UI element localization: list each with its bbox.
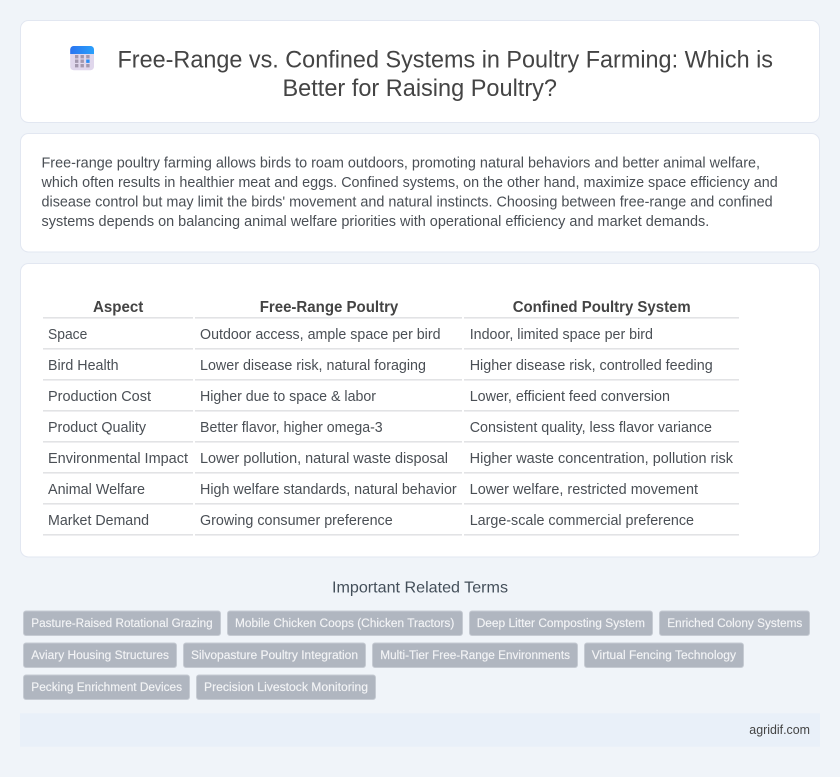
table row: product quality	[43, 420, 739, 443]
panel: introduction	[20, 134, 820, 252]
table header row: Confined Poultry System	[513, 299, 691, 316]
tag	[24, 611, 220, 636]
table row: market demand: Large-scale commercial preference	[470, 513, 694, 529]
tag: Pasture-Raised Rotational Grazing	[31, 616, 213, 630]
tag	[24, 675, 190, 700]
title: Free-Range vs. Confined Systems in Poultry Farming: Which is	[118, 46, 773, 74]
tag	[584, 643, 744, 668]
tag: Enriched Colony Systems	[667, 616, 802, 630]
table row: production cost: Higher due to space & labor	[200, 389, 376, 405]
table row: product quality: Product Quality	[48, 420, 147, 436]
table row: animal welfare: High welfare standards, natural behavior	[200, 482, 457, 498]
text block: introduction paragraph: Free-range poultry farming allows birds to roam outdoors, promoting natural behaviors and better animal welfare,	[42, 156, 760, 172]
table row: space: Indoor, limited space per bird	[470, 327, 653, 343]
table row: environmental impact: Environmental Impact	[48, 451, 188, 467]
title	[118, 46, 773, 102]
text block: introduction paragraph: disease control but may limit the birds' movement and natural instincts. Choosing between free-range and confined	[42, 195, 773, 211]
tag: Pecking Enrichment Devices	[31, 680, 182, 694]
table row: space: Space	[48, 327, 87, 343]
table row: environmental impact	[43, 451, 739, 474]
text block: introduction paragraph: which often results in healthier meat and eggs. Confined systems, on the other hand, maximize space efficiency and	[41, 175, 778, 191]
heading: important related terms: Important Related Terms	[332, 580, 508, 597]
tag	[24, 643, 176, 668]
table row: production cost	[43, 389, 739, 412]
table row: product quality: Better flavor, higher omega-3	[200, 420, 383, 436]
tag: Mobile Chicken Coops (Chicken Tractors)	[235, 616, 454, 630]
tag	[660, 611, 810, 636]
table row: environmental impact: Lower pollution, natural waste disposal	[200, 451, 448, 467]
table header row: Aspect	[93, 299, 144, 316]
icon: calendar	[70, 46, 94, 70]
table row: animal welfare: Lower welfare, restricted movement	[470, 482, 698, 498]
tag: Multi-Tier Free-Range Environments	[380, 648, 570, 662]
table row: space	[43, 327, 739, 350]
tag	[228, 611, 462, 636]
footer	[20, 713, 820, 747]
table row: bird health	[43, 358, 739, 381]
tag	[184, 643, 366, 668]
table row: bird health: Bird Health	[48, 358, 118, 374]
footer: agridif.com	[749, 722, 810, 737]
panel: title card	[20, 20, 820, 122]
text block: introduction paragraph	[41, 156, 778, 230]
tag	[372, 643, 578, 668]
title: Better for Raising Poultry?	[282, 75, 557, 102]
table row: production cost: Lower, efficient feed conversion	[470, 389, 670, 405]
table header row	[43, 299, 739, 319]
table row: animal welfare	[43, 482, 739, 505]
table row: animal welfare: Animal Welfare	[48, 482, 145, 498]
table row: space: Outdoor access, ample space per bird	[200, 327, 440, 343]
tag	[470, 611, 652, 636]
table row: market demand: Growing consumer preference	[200, 513, 393, 529]
table header row: Free-Range Poultry	[260, 299, 398, 316]
tag	[196, 675, 376, 700]
table row: environmental impact: Higher waste concentration, pollution risk	[470, 451, 734, 467]
table row: product quality: Consistent quality, less flavor variance	[470, 420, 712, 436]
tag: Silvopasture Poultry Integration	[191, 648, 358, 662]
table row: bird health: Higher disease risk, controlled feeding	[470, 358, 713, 374]
tag: Deep Litter Composting System	[477, 616, 645, 630]
panel: related term tags	[24, 611, 810, 700]
table row: production cost: Production Cost	[48, 389, 151, 405]
table row: market demand	[43, 513, 739, 536]
panel: comparison table	[20, 264, 820, 557]
tag: Aviary Housing Structures	[31, 648, 169, 662]
tag: Virtual Fencing Technology	[592, 648, 737, 662]
table row: bird health: Lower disease risk, natural foraging	[200, 358, 426, 374]
table row: market demand: Market Demand	[48, 513, 149, 529]
text block: introduction paragraph: systems depends on balancing animal welfare priorities with operational efficiency and market demands.	[42, 214, 709, 230]
tag: Precision Livestock Monitoring	[204, 680, 368, 694]
